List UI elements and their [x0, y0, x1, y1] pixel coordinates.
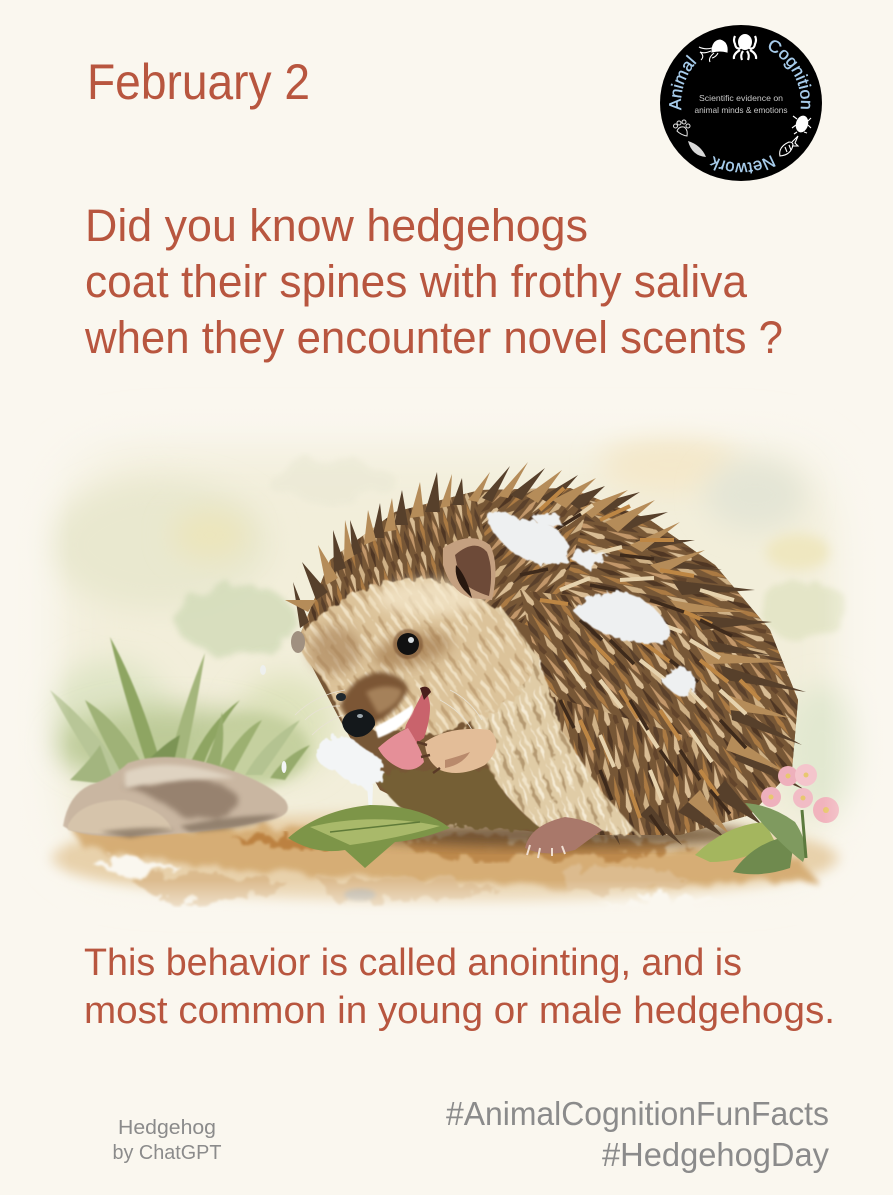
muzzle	[340, 672, 408, 726]
hedgehog	[260, 462, 810, 858]
image credit: Hedgehog	[118, 1117, 216, 1139]
paw	[417, 729, 496, 773]
icon: paw	[674, 120, 690, 136]
icon: octopus	[734, 34, 756, 60]
leaf under snout	[288, 805, 450, 868]
head fur shading	[375, 580, 485, 616]
main question heading: when they encounter novel scents ?	[84, 312, 783, 363]
logo tagline	[694, 93, 788, 115]
outline spikes tan	[285, 462, 790, 835]
rock	[63, 757, 288, 838]
hashtags	[446, 1095, 829, 1173]
logo ring text: Animal	[669, 54, 696, 110]
chest and shoulder fur	[470, 605, 640, 835]
small far eye	[336, 693, 346, 701]
head	[296, 579, 535, 735]
ground	[50, 812, 840, 912]
icon: jellyfish	[699, 40, 727, 62]
fine spines	[520, 488, 760, 835]
logo ring text: Cognition	[768, 40, 812, 109]
logo ring text	[669, 40, 812, 174]
tongue	[378, 687, 431, 770]
eye	[393, 629, 423, 659]
edge fade	[0, 390, 893, 950]
hashtags: #HedgehogDay	[602, 1136, 829, 1173]
froth dripping at mouth	[260, 665, 383, 812]
main question heading: Did you know hedgehogs	[85, 200, 588, 251]
hashtags: #AnimalCognitionFunFacts	[446, 1095, 829, 1132]
body shadow	[365, 823, 755, 847]
froth on spines	[485, 511, 695, 695]
ear	[443, 538, 496, 600]
icon: feather	[688, 141, 706, 157]
grass	[50, 637, 310, 785]
froth on muzzle	[375, 705, 413, 738]
cream spines	[520, 505, 746, 802]
main question heading: coat their spines with frothy saliva	[85, 256, 748, 307]
icon: beetle	[792, 115, 811, 134]
illustration background wash	[50, 437, 862, 870]
lower belly	[375, 768, 548, 832]
explanatory text	[84, 942, 835, 1032]
date heading: February 2	[87, 54, 310, 110]
image credit: by ChatGPT	[112, 1142, 222, 1164]
explanatory text: This behavior is called anointing, and is	[84, 942, 742, 984]
watercolor illustration: hedgehog anointing	[38, 428, 862, 908]
dark spines	[520, 514, 746, 835]
spines body	[301, 488, 798, 835]
flowers and leaves	[695, 764, 839, 874]
logo tagline: Scientific evidence on	[699, 93, 783, 103]
hind foot	[525, 817, 602, 858]
outline spikes dark	[293, 466, 806, 845]
icon: fish	[780, 136, 798, 156]
nose	[342, 709, 375, 737]
main question heading	[84, 200, 783, 363]
logo ring text: Network	[710, 155, 776, 174]
logo: Animal Cognition Network badge	[660, 25, 822, 181]
orange spines	[540, 488, 760, 818]
image credit	[112, 1117, 222, 1164]
explanatory text: most common in young or male hedgehogs.	[84, 990, 835, 1032]
logo tagline: animal minds & emotions	[694, 105, 788, 115]
whiskers	[295, 690, 482, 735]
